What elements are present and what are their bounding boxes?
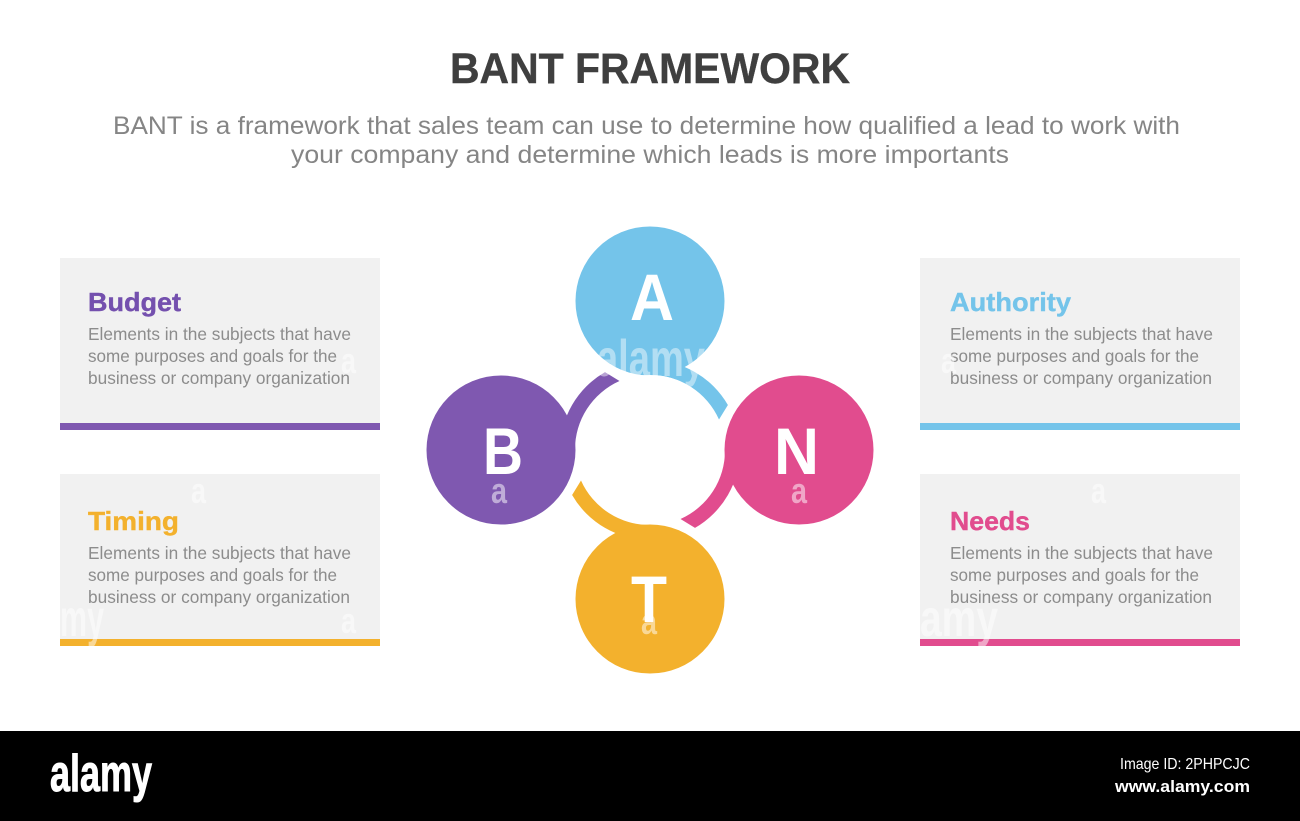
text block: needs: some purposes and goals for the (950, 565, 1199, 585)
watermark overlays: my (60, 590, 104, 648)
text block: timing: business or company organization (88, 587, 350, 607)
circle: T (576, 524, 724, 674)
heading: timing: Timing (88, 506, 179, 536)
watermark overlays: a (491, 470, 508, 511)
heading: needs: Needs (950, 506, 1030, 536)
subtitle (113, 112, 1180, 169)
letter: A: A (630, 260, 674, 334)
text block: budget: business or company organization (88, 368, 350, 388)
watermark overlays: a (941, 340, 957, 381)
panel: timing (60, 474, 380, 646)
watermark overlays: alamy (597, 330, 705, 388)
heading: authority: Authority (950, 287, 1072, 317)
text block: timing: some purposes and goals for the (88, 565, 337, 585)
tail: authority (650, 360, 728, 420)
image id: Image ID: 2PHPCJC (1120, 756, 1250, 773)
watermark overlays: a (791, 470, 808, 511)
letter: B: B (483, 414, 523, 488)
text block: timing: Elements in the subjects that have (88, 543, 351, 563)
footer logo: alamy (50, 745, 152, 803)
text block: budget: some purposes and goals for the (88, 346, 337, 366)
watermark overlays: a (341, 600, 357, 641)
center hole (576, 375, 724, 524)
title: BANT FRAMEWORK (450, 45, 850, 93)
text block: authority: some purposes and goals for the (950, 346, 1199, 366)
watermark overlays: a (1091, 470, 1107, 511)
subtitle: BANT is a framework that sales team can use to determine how qualified a lead to work with (113, 112, 1180, 140)
text block: authority: Elements in the subjects that have (950, 324, 1213, 344)
heading: budget: Budget (88, 287, 181, 317)
text block: needs (950, 543, 1213, 607)
circle: B (426, 376, 576, 524)
text block: budget (88, 324, 351, 388)
subtitle: your company and determine which leads is more importants (291, 141, 1009, 169)
text block: authority (950, 324, 1213, 388)
circular diagram (426, 226, 874, 674)
watermark overlays: a (641, 601, 658, 642)
text block: needs: Elements in the subjects that have (950, 543, 1213, 563)
watermark overlays (60, 330, 1107, 648)
panel: authority (920, 258, 1240, 430)
panel: needs (920, 474, 1240, 646)
circle: N (724, 376, 874, 524)
circle: A (576, 226, 724, 376)
footer bar (0, 731, 1300, 821)
letter: N: N (774, 414, 819, 488)
text block: authority: business or company organization (950, 368, 1212, 388)
website: www.alamy.com (1114, 777, 1250, 796)
watermark overlays: amy (920, 590, 998, 648)
tail: needs (680, 450, 740, 528)
watermark overlays: a (341, 340, 357, 381)
watermark overlays: a (191, 470, 207, 511)
panel: budget (60, 258, 380, 430)
text block: needs: business or company organization (950, 587, 1212, 607)
text block: budget: Elements in the subjects that have (88, 324, 351, 344)
letter: T: T (631, 562, 667, 636)
tail: timing (572, 480, 650, 540)
text block: timing (88, 543, 351, 607)
tail: budget (560, 372, 620, 450)
